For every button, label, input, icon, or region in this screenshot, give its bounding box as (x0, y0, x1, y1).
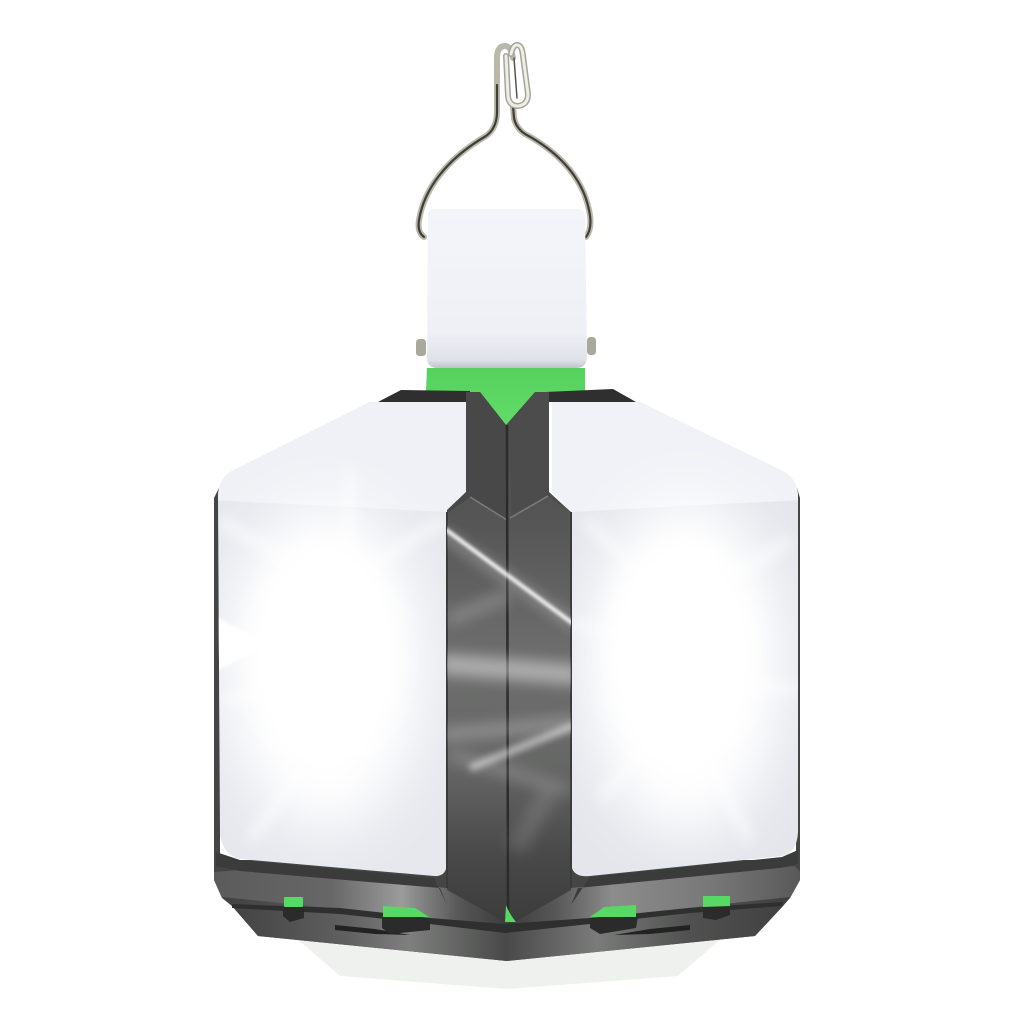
bottom diffuser (296, 938, 722, 989)
green power tabs (284, 896, 730, 922)
lantern body shell (214, 488, 800, 961)
green collar (426, 368, 585, 426)
skirt band (214, 866, 800, 926)
side screws (416, 337, 596, 356)
base clips (283, 907, 730, 934)
illustration: hanging lantern (214, 42, 800, 989)
hanging wire hook (419, 45, 590, 237)
right light panel (548, 395, 805, 885)
light rays across column (447, 524, 571, 852)
dark band below panels (216, 850, 798, 905)
lower base band (222, 897, 790, 961)
dark top rim (378, 389, 636, 402)
left light panel (210, 395, 470, 885)
centre column (447, 392, 571, 922)
white top cap (427, 209, 587, 368)
